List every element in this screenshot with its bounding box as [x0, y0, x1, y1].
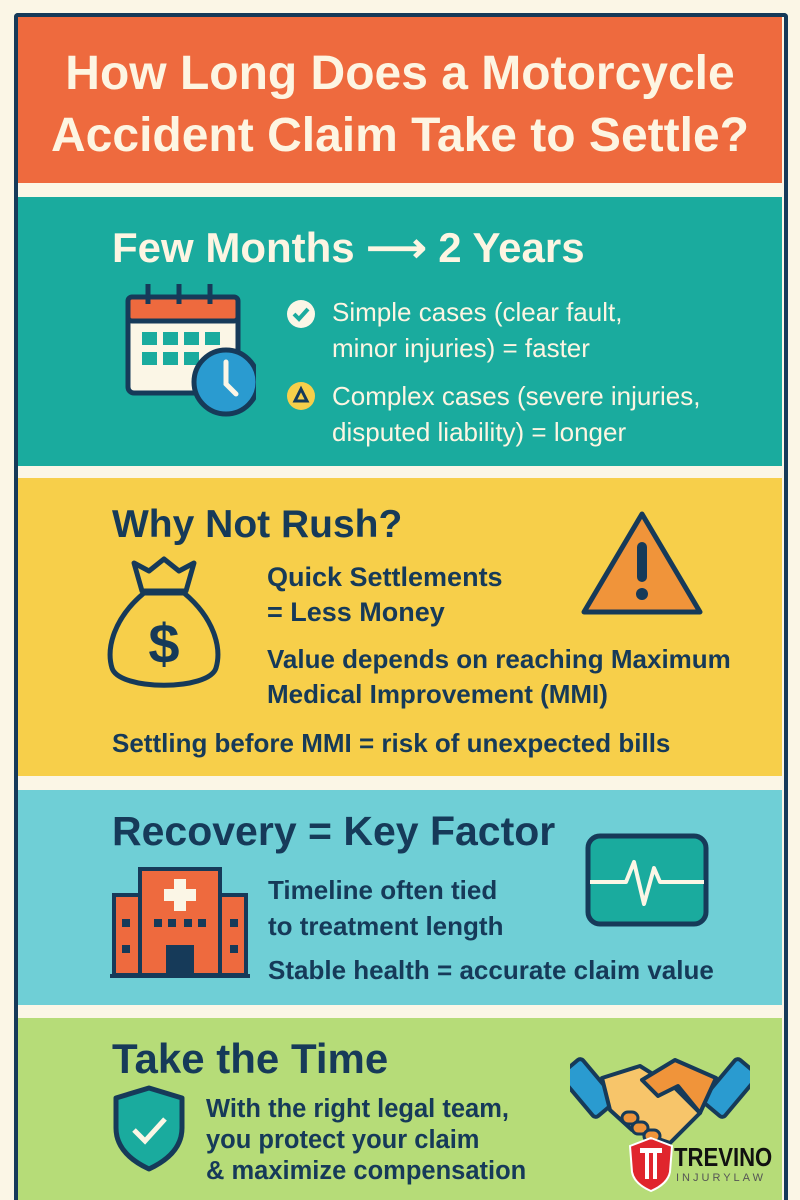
- heading: why not rush: Why Not Rush?: [112, 503, 402, 546]
- text: stable health: Stable health = accurate claim value: [268, 955, 714, 985]
- text: simple cases: minor injuries) = faster: [332, 333, 590, 363]
- heading: take the time: Take the Time: [112, 1035, 388, 1082]
- text: complex cases: disputed liability) = longer: [332, 417, 626, 447]
- text: value depends: Value depends on reaching Maximum: [267, 644, 731, 674]
- icon: calendar with clock: [126, 284, 256, 416]
- logo: trevino injury law: [629, 1136, 772, 1192]
- title: How Long Does a Motorcycle: [65, 47, 735, 100]
- text: quick settlements: = Less Money: [267, 597, 445, 627]
- text: simple cases: Simple cases (clear fault,: [332, 297, 622, 327]
- text: legal team: & maximize compensation: [206, 1157, 526, 1185]
- logo: trevino injury law: INJURYLAW: [676, 1172, 766, 1184]
- title: [51, 47, 749, 162]
- panel: take the time: [18, 1018, 782, 1200]
- icon: heart monitor: [586, 834, 708, 926]
- icon: money bag: [108, 556, 220, 688]
- text: legal team: you protect your claim: [206, 1126, 479, 1154]
- text: simple cases: [332, 297, 622, 363]
- text: legal team: [206, 1095, 526, 1185]
- panel: why not rush: [18, 478, 782, 776]
- title: Accident Claim Take to Settle?: [51, 109, 749, 162]
- panel: recovery: [18, 790, 782, 1005]
- text: quick settlements: [267, 562, 503, 627]
- text: value depends: [267, 644, 731, 709]
- text: timeline tied: Timeline often tied: [268, 875, 497, 905]
- icon: warning triangle: [582, 512, 702, 614]
- icon: hospital: [110, 867, 250, 978]
- text: complex cases: [332, 381, 700, 447]
- text: value depends: Medical Improvement (MMI): [267, 679, 608, 709]
- panel: timeline: [18, 197, 782, 466]
- icon: handshake: [570, 1057, 750, 1144]
- icon: check: [287, 300, 315, 328]
- heading: few months: Few Months ⟶ 2 Years: [112, 224, 585, 271]
- logo: trevino injury law: TREVINO: [674, 1142, 772, 1172]
- heading: recovery: Recovery = Key Factor: [112, 808, 555, 854]
- text: quick settlements: Quick Settlements: [267, 562, 503, 592]
- text: settling before MMI: Settling before MMI = risk of unexpected bills: [112, 728, 670, 758]
- icon: warning small: [287, 382, 315, 410]
- icon: shield: [114, 1086, 184, 1172]
- text: legal team: With the right legal team,: [206, 1095, 509, 1123]
- text: complex cases: Complex cases (severe injuries,: [332, 381, 700, 411]
- text: timeline tied: [268, 875, 503, 941]
- icon: money bag: $: [148, 612, 180, 675]
- panel: title: [18, 17, 782, 183]
- text: timeline tied: to treatment length: [268, 911, 503, 941]
